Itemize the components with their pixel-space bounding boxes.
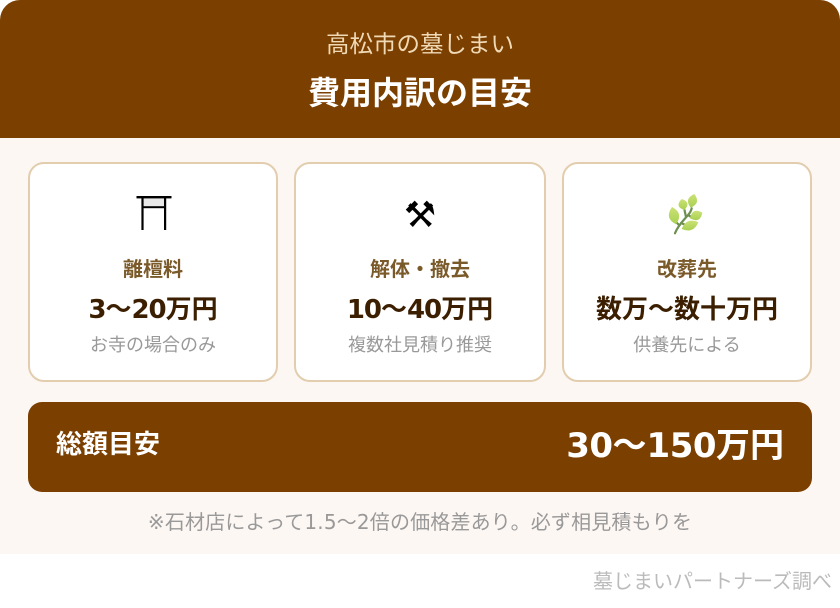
total value: 30〜150万円 <box>566 426 784 466</box>
note: temple only: お寺の場合のみ <box>90 335 216 356</box>
title: 費用内訳の目安 <box>308 74 532 112</box>
note: depends on memorial site: 供養先による <box>633 335 741 356</box>
icon: herb <box>668 194 702 234</box>
label: 改葬先: 改葬先 <box>657 257 717 281</box>
value: 数万〜数十万円: 数万〜数十万円 <box>596 295 778 325</box>
label: 解体・撤去: 解体・撤去 <box>370 257 470 281</box>
panel: card 解体・撤去 <box>294 162 546 382</box>
label: 離檀料: 離檀料 <box>123 257 183 281</box>
icon: torii gate <box>136 196 172 230</box>
header band <box>0 0 840 138</box>
source credit: 墓じまいパートナーズ調べ <box>593 569 832 593</box>
subtitle: 高松市の墓じまい <box>326 30 514 58</box>
value: 3〜20万円: 3〜20万円 <box>88 295 218 325</box>
total label: 総額目安 <box>56 430 160 460</box>
value: 10〜40万円: 10〜40万円 <box>347 295 493 325</box>
panel: total bar <box>28 402 812 492</box>
panel: card 改葬先 <box>562 162 812 382</box>
icon: crossed hammers: ⚒ <box>404 195 436 236</box>
panel: card 離檀料 <box>28 162 278 382</box>
footnote: ※石材店によって1.5〜2倍の価格差あり。必ず相見積もりを <box>148 510 692 534</box>
note: compare quotes: 複数社見積り推奨 <box>348 335 492 356</box>
